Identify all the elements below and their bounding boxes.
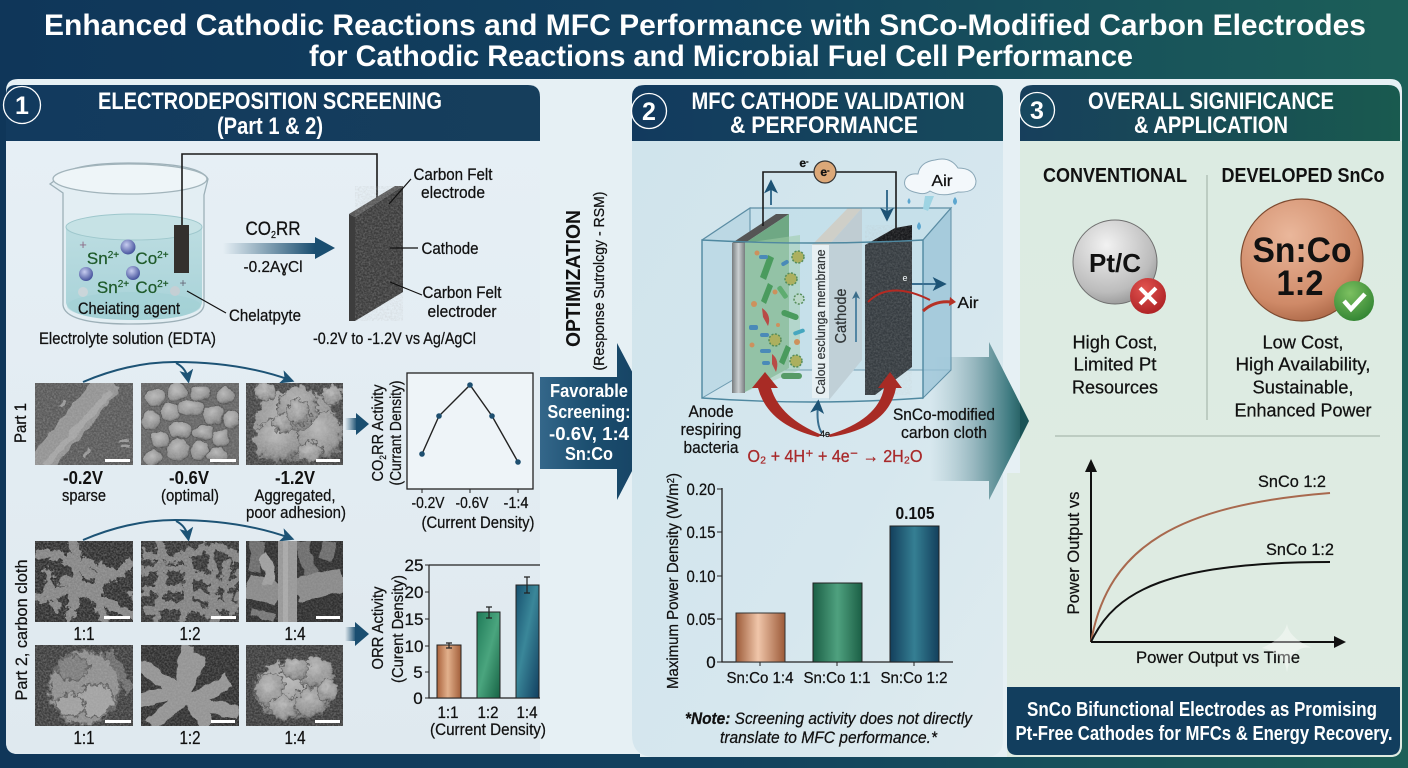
bar chart: maximum power density: Sn:Co 1:1 — [804, 670, 871, 687]
bar chart: ORR activity: (Curent Density) — [390, 575, 407, 683]
caption row: part 2 top — [74, 624, 306, 644]
SEM image: part 2 bottom 1:2 — [141, 645, 239, 726]
line chart: CO2RR activity: -0.2V — [412, 495, 445, 512]
panel: overall significance — [1007, 85, 1402, 757]
line chart: CO2RR activity — [370, 373, 534, 532]
carbon felt electrode — [349, 186, 403, 321]
bar chart: ORR activity: 25 — [404, 556, 424, 575]
bar chart: ORR activity: 5 — [413, 663, 423, 682]
label: anode: Anode — [688, 402, 734, 421]
arc arrows: part 1 — [83, 362, 290, 382]
line chart: CO2RR activity: (Currant Density) — [388, 380, 405, 486]
bar chart: maximum power density: 0.105 — [896, 503, 935, 523]
dissolved ions — [78, 237, 187, 297]
airflow arrows — [868, 284, 979, 312]
bar chart: ORR activity: 1:2 — [478, 703, 498, 722]
red reaction arrows — [752, 372, 902, 437]
text: conventional drawbacks: Resources — [1072, 376, 1158, 398]
dissolved ions: + — [79, 237, 87, 252]
label: potential range: -0.2V to -1.2V vs Ag/AgCl — [313, 330, 476, 348]
caption: -1.2V: -1.2V — [275, 468, 315, 488]
icon: Pt/C coin with cross: Pt/C — [1089, 248, 1141, 278]
line chart: CO2RR activity: CO — [370, 458, 387, 482]
bar chart: ORR activity: 1:4 — [516, 703, 538, 722]
note: translate to MFC performance.* — [720, 729, 938, 747]
panel 2 header: 2 — [642, 98, 656, 126]
label: SnCo cathode — [893, 405, 995, 442]
line chart: power output vs time: Power Output vs — [1064, 492, 1083, 614]
side label: part 1: Part 1 — [12, 403, 30, 443]
text: SnCo benefits: Low Cost, — [1262, 332, 1344, 352]
arrow: CO2RR: 2 — [271, 230, 276, 241]
bar chart: maximum power density: 2 — [666, 478, 677, 483]
bar chart: ORR activity: (Current Density) — [430, 721, 546, 739]
bar chart: maximum power density: ) — [665, 473, 682, 478]
caption: -1.2V — [246, 468, 346, 522]
external circuit: - — [827, 166, 830, 175]
caption: -0.2V — [62, 468, 106, 505]
electrode labels: Carbon Felt — [414, 166, 493, 184]
text: SnCo benefits: Sustainable, — [1252, 376, 1354, 398]
icon: beaker with electrolyte — [50, 163, 208, 324]
text: SnCo benefits: High Availability, — [1236, 354, 1370, 374]
tank top edges — [702, 208, 951, 240]
dividers — [1206, 175, 1208, 420]
dissolved ions: Co — [135, 278, 157, 297]
line chart: CO2RR activity: (Current Density) — [422, 514, 534, 532]
label: SnCo cathode: SnCo-modified — [893, 405, 995, 424]
dissolved ions: Co — [135, 249, 157, 268]
bar chart: ORR activity: 0 — [413, 689, 423, 708]
label: SnCo cathode: carbon cloth — [901, 423, 987, 442]
label: anode — [680, 402, 742, 457]
external circuit: - — [806, 157, 809, 166]
caption: -0.6V: (optimal) — [161, 487, 219, 505]
arrow: favorable screening — [540, 343, 658, 500]
caption row: part 2 bottom — [74, 728, 306, 748]
membrane: Calou esclunga membrane — [813, 250, 828, 394]
side label: part 2: Part 2, carbon cloth — [12, 560, 31, 700]
optimization column — [540, 192, 658, 500]
panel 3 header: OVERALL SIGNIFICANCE — [1088, 88, 1334, 115]
external circuit — [763, 156, 896, 228]
airflow arrows: Air — [958, 295, 979, 312]
title: for Cathodic Reactions and Microbial Fuel Cell Performance — [309, 40, 1133, 73]
caption row: part 2 bottom: 1:2 — [180, 728, 200, 748]
icon: air cloud: Air — [932, 173, 953, 190]
dissolved ions: Sn — [87, 249, 108, 268]
dissolved ions: 2+ — [157, 250, 169, 261]
diagram: microbial fuel cell — [680, 156, 995, 466]
arrow: favorable screening: -0.6V, 1:4 — [549, 424, 629, 444]
panel 2 background — [632, 141, 1003, 757]
panel 1 header: (Part 1 & 2) — [217, 113, 323, 140]
electrode labels: Cathode — [422, 240, 478, 258]
electrode labels: electrode — [421, 184, 485, 202]
text: SnCo benefits: Enhanced Power — [1234, 400, 1372, 420]
glass tank back — [750, 208, 951, 370]
SEM image: part 2 top 1:1 — [35, 541, 139, 622]
icon: Pt/C coin with cross — [1073, 220, 1166, 314]
caption row: part 2 bottom: 1:1 — [74, 728, 94, 748]
panel 2 header: MFC CATHODE VALIDATION — [692, 88, 964, 115]
banner: conclusion — [1007, 687, 1400, 755]
bar chart: ORR activity: ORR Activity — [370, 586, 387, 670]
carbon cloth cathode — [865, 225, 912, 395]
bar chart: maximum power density: 0.10 — [686, 567, 716, 586]
arrow: favorable screening: Screening: — [548, 402, 630, 422]
panel: electrodeposition screening — [4, 85, 546, 754]
anode with bacteria — [732, 214, 805, 393]
bar chart: ORR activity — [370, 556, 546, 739]
panel 1 header — [4, 85, 540, 141]
line chart: CO2RR activity: -1:4 — [504, 495, 529, 512]
panel 1 background — [6, 141, 540, 754]
caption: -0.6V — [161, 468, 219, 505]
icon: SnCo coin with check: 1:2 — [1276, 264, 1324, 303]
arrow: CO2RR: RR — [276, 219, 300, 240]
label: electrolyte solution: Electrolyte solution (EDTA) — [39, 330, 216, 348]
bar chart: ORR activity: 1:1 — [438, 703, 458, 722]
icon: beaker with electrolyte: Cheiating agent — [78, 300, 180, 318]
bar chart: maximum power density: 0.15 — [686, 523, 716, 542]
dissolved ions: + — [179, 276, 187, 290]
title — [44, 9, 1366, 73]
arrow: favorable screening: Sn:Co — [565, 444, 613, 464]
bar chart: maximum power density: 0.20 — [686, 480, 716, 499]
panel 3 header: 3 — [1030, 97, 1044, 125]
sparkle — [1262, 624, 1312, 672]
caption row: part 2 bottom: 1:4 — [284, 728, 306, 748]
bar chart: ORR activity: 10 — [404, 637, 424, 656]
line chart: power output vs time — [1064, 459, 1346, 672]
blue arrow up to membrane — [818, 404, 830, 439]
panel 3 header: & APPLICATION — [1134, 112, 1288, 139]
label: anode: bacteria — [684, 438, 739, 457]
line chart: CO2RR activity: RR Activity — [370, 385, 387, 455]
equation: O₂ + 4H⁺ + 4e⁻ → 2H₂O — [748, 446, 922, 466]
bar chart: maximum power density: 0 — [706, 653, 716, 672]
membrane — [812, 208, 862, 400]
text: conventional drawbacks: High Cost, — [1072, 332, 1158, 352]
label: chelatpyte: Chelatpyte — [229, 307, 301, 325]
icon: SnCo coin with check — [1241, 199, 1374, 321]
label: optimization: OPTIMIZATION — [563, 210, 585, 347]
arrow: part 2 to chart — [345, 622, 369, 646]
dissolved ions: 2+ — [108, 250, 119, 261]
membrane: Cathode — [833, 288, 850, 344]
SEM image: part 2 top 1:2 — [141, 541, 240, 622]
glass tank front — [702, 240, 923, 402]
dissolved ions: 2+ — [157, 279, 169, 290]
dissolved ions: 2+ — [118, 279, 129, 290]
arrow: favorable screening: Favorable — [550, 381, 628, 401]
label: response surface methodology: (Response Sutrolcgy - RSM) — [591, 192, 608, 370]
SEM image: part 2 bottom 1:1 — [35, 645, 133, 726]
text: conventional drawbacks — [1072, 332, 1158, 398]
text: conventional drawbacks: Limited Pt — [1074, 354, 1156, 374]
label: chelatpyte — [187, 291, 301, 325]
arrow: CO2RR: -0.2ΑɣCl — [244, 259, 302, 276]
bar chart: maximum power density: Sn:Co 1:2 — [880, 670, 948, 687]
divider — [1055, 435, 1380, 437]
caption: -1.2V: Aggregated, — [254, 487, 336, 505]
bar chart: ORR activity: 15 — [404, 610, 424, 629]
electrode labels: electroder — [428, 303, 497, 321]
panel 2 header: & PERFORMANCE — [730, 112, 918, 139]
caption: -0.2V: -0.2V — [63, 468, 103, 488]
panel: MFC cathode validation — [632, 85, 1402, 757]
arrow: CO2RR — [223, 219, 335, 276]
dissolved ions: Sn — [97, 278, 118, 297]
label: anode: respiring — [680, 420, 742, 439]
line chart: CO2RR activity: 2 — [378, 455, 388, 460]
panel 3 background — [1007, 141, 1402, 757]
blue arrow up to membrane: 4e — [820, 429, 830, 439]
SEM image: -0.2V sparse — [35, 383, 133, 465]
caption: -1.2V: poor adhesion) — [246, 504, 346, 522]
arrow: to significance panel — [930, 342, 1029, 500]
external circuit: e — [820, 165, 827, 179]
bar chart: maximum power density: Maximum Power Density (W/m — [665, 469, 682, 689]
arrow tip over panel 3 — [1020, 403, 1029, 439]
caption: -0.2V: sparse — [62, 487, 106, 505]
SEM image: -0.6V optimal — [141, 383, 239, 466]
carbon cloth cathode: e — [902, 273, 908, 283]
heading: developed SnCo: DEVELOPED SnCo — [1222, 165, 1384, 187]
wire from beaker to electrode — [182, 154, 377, 225]
SEM image: part 2 bottom 1:4 — [246, 645, 343, 726]
line chart: power output vs time: Power Output vs Time — [1136, 648, 1300, 667]
arrow: part 1 to chart — [345, 413, 369, 435]
bar chart: maximum power density: 0.05 — [686, 610, 716, 629]
line chart: CO2RR activity: -0.6V — [456, 495, 489, 512]
external circuit: e — [799, 156, 806, 170]
title: Enhanced Cathodic Reactions and MFC Performance with SnCo-Modified Carbon Electrodes — [44, 9, 1366, 42]
bar chart: maximum power density — [665, 473, 953, 689]
panel 1 header: ELECTRODEPOSITION SCREENING — [98, 88, 442, 115]
heading: conventional: CONVENTIONAL — [1043, 165, 1187, 187]
electrode labels — [389, 166, 502, 321]
arrow: CO2RR: CO — [246, 219, 274, 240]
icon: air cloud — [905, 159, 976, 230]
note: *Note: Screening activity does not directly — [685, 710, 974, 728]
caption row: part 2 top: 1:1 — [74, 624, 94, 644]
bar chart: ORR activity: 20 — [404, 583, 424, 602]
bar chart: maximum power density: Sn:Co 1:4 — [726, 670, 794, 687]
arc arrows: part 2 — [83, 520, 290, 540]
text: SnCo benefits — [1234, 332, 1372, 420]
SEM image: -1.2V aggregated — [246, 383, 343, 465]
caption row: part 2 top: 1:4 — [284, 624, 306, 644]
caption: -0.6V: -0.6V — [169, 468, 209, 488]
line chart: power output vs time: SnCo 1:2 — [1266, 541, 1334, 559]
panel 2 header — [632, 85, 1003, 141]
caption row: part 2 top: 1:2 — [180, 624, 200, 644]
SEM image: part 2 top 1:4 — [246, 541, 343, 622]
panel 1 header: 1 — [15, 92, 29, 120]
icon: SnCo coin with check: Sn:Co — [1252, 231, 1352, 270]
electrode labels: Carbon Felt — [422, 284, 502, 302]
panel 3 header — [1020, 85, 1400, 141]
note — [685, 710, 974, 747]
line chart: power output vs time: SnCo 1:2 — [1258, 473, 1326, 491]
